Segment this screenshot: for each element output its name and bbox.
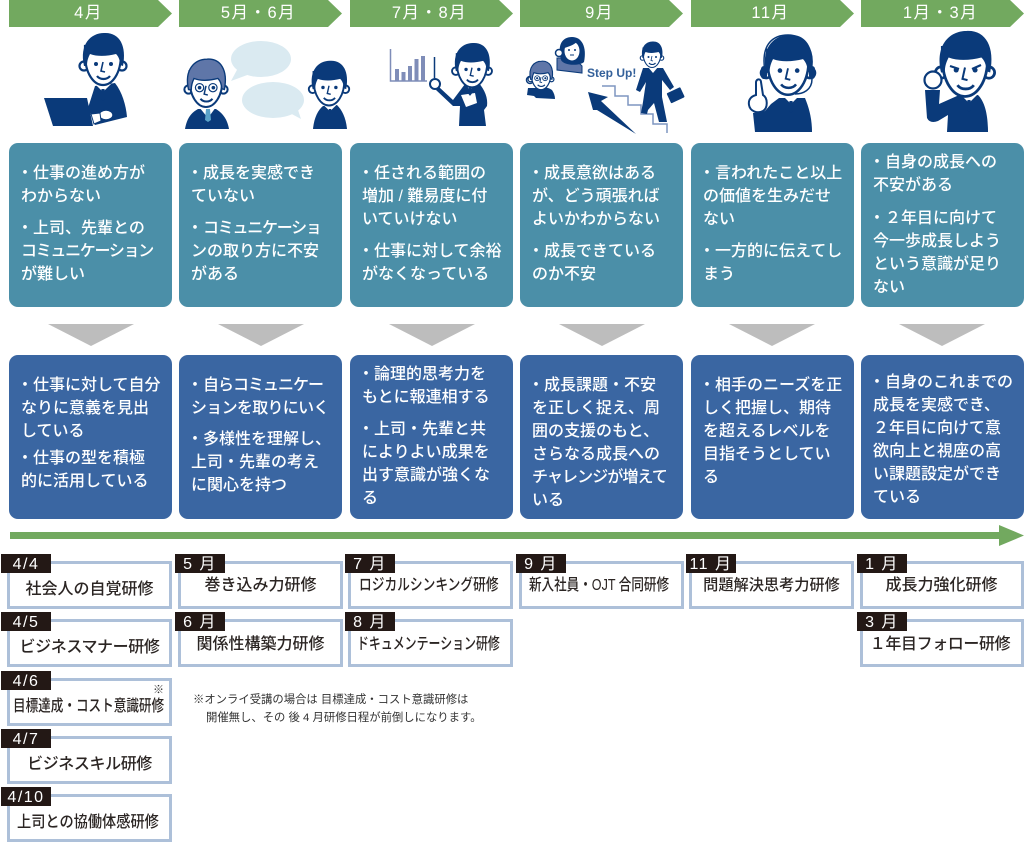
issues text	[699, 164, 842, 283]
icon: man presenting a bar chart	[390, 43, 492, 126]
header arrow: 9月: 9月	[585, 4, 614, 22]
date label: 4/5	[1, 612, 51, 631]
outcomes text: に関心を持つ	[191, 477, 287, 494]
outcomes text: ている	[873, 489, 921, 506]
panel: 7月・8月 issues	[350, 143, 513, 307]
date label: 7月: 7 月	[353, 556, 387, 573]
header arrow: 1月・3月	[861, 0, 1024, 27]
training box: 成長力強化研修: 成長力強化研修	[885, 577, 998, 594]
issues text	[528, 164, 660, 283]
training box: ビジネスマナー研修: ビジネスマナー研修	[20, 639, 159, 656]
training box: ビジネスマナー研修	[7, 619, 172, 667]
panel: 11月 issues	[691, 143, 854, 307]
speech bubbles	[231, 41, 304, 119]
issues text: 不安がある	[873, 177, 953, 194]
outcomes text	[869, 373, 1013, 506]
issues text: 上司、先輩との	[33, 220, 145, 237]
issues text: コミュニケーション	[21, 243, 153, 260]
training box: 目標達成・コスト意識研修: ※	[153, 684, 164, 696]
outcomes text: 欲向上と視座の高	[873, 443, 1001, 460]
outcomes text: 成長を実感でき、	[873, 397, 1000, 414]
issues text: ない	[703, 211, 735, 228]
date label: 1月	[857, 554, 907, 573]
icon: man with headset raising finger	[749, 35, 815, 132]
outcomes text: ・	[699, 377, 715, 394]
date label: 4/7	[1, 729, 51, 748]
outcomes text: 目指そうとしてい	[703, 446, 831, 463]
panel: 1月・3月 issues	[861, 143, 1024, 307]
training box: ロジカルシンキング研修: ロジカルシンキング研修	[359, 577, 499, 594]
panel: 9月 issues	[520, 143, 683, 307]
outcomes text: 自らコミュニケー	[203, 377, 323, 394]
training box: 関係性構築力研修	[178, 619, 343, 667]
issues text: の価値を生みだせ	[703, 188, 831, 205]
header arrow: 9月	[520, 0, 683, 27]
issues text: ２年目に向けて	[885, 210, 997, 227]
outcomes text	[358, 365, 490, 507]
issues text: ・	[699, 165, 715, 182]
date label: 8月	[345, 612, 395, 631]
outcomes text: 多様性を理解し、	[203, 431, 331, 448]
issues text: が、どう頑張れば	[532, 188, 660, 205]
header arrow: 7月・8月: 7月・8月	[392, 4, 467, 22]
panel: 7月・8月 outcomes	[350, 355, 513, 519]
outcomes text: ・	[187, 431, 203, 448]
training box: 1年目フォロー研修: １年目フォロー研修	[870, 636, 1010, 653]
training box: 問題解決思考力研修: 問題解決思考力研修	[703, 577, 840, 594]
outcomes text: 上司・先輩の考え	[191, 454, 319, 471]
header arrow: 1月・3月: 1月・3月	[903, 4, 978, 22]
issues text: ・	[17, 220, 33, 237]
issues text: 増加 / 難易度に付	[362, 188, 487, 205]
outcomes text: している	[21, 423, 85, 440]
issues text: が難しい	[21, 266, 85, 283]
outcomes text: る	[703, 469, 719, 486]
date label: 4/6: 4/6	[13, 673, 39, 690]
issues text: がなくなっている	[362, 266, 489, 283]
outcomes text: 成長課題・不安	[544, 377, 656, 394]
arrow: down 2	[218, 324, 304, 346]
issues text	[358, 164, 502, 283]
arrow: down 5	[729, 324, 815, 346]
outcomes text: 囲の支援のもと、	[532, 423, 659, 440]
outcomes text: ・	[358, 366, 374, 383]
training box: 成長力強化研修	[860, 561, 1024, 609]
header arrow: 11月: 11月	[751, 4, 790, 22]
icon: manager and employee talking	[184, 41, 349, 129]
date label: 7月	[345, 554, 395, 573]
outcomes text: によりよい成果を	[362, 444, 490, 461]
arrow: down 4	[559, 324, 645, 346]
training box: 新入社員・OJT 合同研修	[519, 561, 684, 609]
issues text: のか不安	[532, 266, 596, 283]
arrow: timeline	[10, 525, 1024, 546]
date label: 11月: 11 月	[689, 556, 733, 573]
outcomes text: を超えるレベルを	[703, 423, 831, 440]
date label: 4/10	[1, 787, 51, 806]
issues text: ・	[869, 210, 885, 227]
training box: ビジネスキル研修	[7, 736, 172, 784]
issues text	[869, 153, 1001, 296]
issues text: ・	[187, 165, 203, 182]
outcomes text: ・	[358, 421, 374, 438]
training box: 関係性構築力研修: 関係性構築力研修	[196, 636, 324, 653]
issues text: という意識が足り	[873, 256, 1001, 273]
issues text: 成長意欲はある	[544, 165, 656, 182]
panel: 9月 outcomes	[520, 355, 683, 519]
date label: 6月	[175, 612, 225, 631]
illustrations layer	[44, 30, 996, 134]
issues text: ・	[528, 243, 544, 260]
training box: ビジネスキル研修: ビジネスキル研修	[27, 756, 152, 773]
issues text: 今一歩成長しよう	[873, 233, 1001, 250]
date label: 4/6	[1, 671, 51, 690]
issues text: まう	[703, 266, 735, 283]
issues text	[17, 164, 154, 283]
issues text: わからない	[21, 188, 101, 205]
training box: 巻き込み力研修	[178, 561, 343, 609]
issues text: ンの取り方に不安	[191, 243, 319, 260]
Step Up label: Step Up!	[587, 66, 636, 80]
outcomes text: 仕事に対して自分	[33, 377, 161, 394]
date label: 5月	[175, 554, 225, 573]
header arrow: 4月	[9, 0, 172, 27]
panel: 5月・6月 issues	[179, 143, 342, 307]
date label: 3月: 3 月	[865, 614, 899, 631]
issues text: コミュニケーショ	[203, 220, 321, 237]
date label: 5月: 5 月	[183, 556, 217, 573]
issues text: ・	[17, 165, 33, 182]
outcomes text: 上司・先輩と共	[374, 421, 486, 438]
issues text: 任される範囲の	[374, 165, 486, 182]
training box: ロジカルシンキング研修	[348, 561, 513, 609]
issues text: がある	[191, 266, 239, 283]
outcomes text: ・	[528, 377, 544, 394]
date label: 4/4: 4/4	[13, 556, 39, 573]
outcomes text: 相手のニーズを正	[715, 377, 842, 394]
header arrow: 11月	[691, 0, 854, 27]
issues text: ・	[187, 220, 203, 237]
issues text: 成長を実感でき	[203, 165, 315, 182]
outcomes text: チャレンジが増えて	[532, 469, 667, 486]
issues text: よいかわからない	[532, 211, 660, 228]
outcomes text: しく把握し、期待	[703, 400, 831, 417]
outcomes text	[17, 376, 161, 490]
issues text: ていない	[191, 188, 255, 205]
outcomes text: 仕事の型を積極	[33, 450, 145, 467]
training box: 社会人の自覚研修: 社会人の自覚研修	[25, 581, 154, 598]
issues text: 言われたこと以上	[715, 165, 842, 182]
outcomes text: なりに意義を見出	[21, 400, 149, 417]
header arrow: 7月・8月	[350, 0, 513, 27]
footnote: 開催無し、その 後 4 月研修日程が前倒しになります。	[206, 712, 482, 724]
panel: 4月 issues	[9, 143, 172, 307]
outcomes text: 論理的思考力を	[374, 366, 486, 383]
outcomes text: ２年目に向けて意	[873, 420, 1001, 437]
panel: 5月・6月 outcomes	[179, 355, 342, 519]
date label: 9月: 9 月	[524, 556, 558, 573]
issues text: ・	[699, 243, 715, 260]
issues text: 仕事の進め方が	[33, 165, 145, 182]
issues text: 成長できている	[544, 243, 656, 260]
outcomes text: 出す意識が強くな	[362, 467, 490, 484]
arrow: down 6	[899, 324, 985, 346]
date label: 4/10: 4/10	[7, 789, 45, 806]
outcomes text: ・	[17, 377, 33, 394]
outcomes text: さらなる成長への	[532, 446, 660, 463]
outcomes text	[528, 376, 667, 509]
issues text: ・	[869, 154, 885, 171]
training box: 新入社員・OJT 合同研修: 新入社員・OJT 合同研修	[529, 577, 669, 594]
icon: step up staircase with colleagues	[526, 37, 685, 134]
panel: 11月 outcomes	[691, 355, 854, 519]
header arrow: 5月・6月	[179, 0, 342, 27]
outcomes text: ・	[869, 374, 885, 391]
training box: 1年目フォロー研修	[860, 619, 1024, 667]
outcomes text: ・	[187, 377, 203, 394]
date label: 1月: 1 月	[865, 556, 899, 573]
icon: man at laptop	[44, 33, 127, 126]
date label: 4/7: 4/7	[13, 731, 39, 748]
issues text: ない	[873, 279, 905, 296]
training box: 巻き込み力研修: 巻き込み力研修	[204, 577, 316, 594]
outcomes text: を正しく捉え、周	[532, 400, 660, 417]
training box: 目標達成・コスト意識研修	[7, 678, 172, 726]
outcomes text	[187, 376, 331, 494]
issues text: 一方的に伝えてし	[715, 243, 842, 260]
date label: 8月: 8 月	[353, 614, 387, 631]
panel: 1月・3月 outcomes	[861, 355, 1024, 519]
panel: 4月 outcomes	[9, 355, 172, 519]
training box: 上司との協働体感研修: 上司との協働体感研修	[17, 814, 159, 831]
date label: 4/5: 4/5	[13, 614, 39, 631]
date label: 3月	[857, 612, 907, 631]
issues text: いていけない	[362, 211, 458, 228]
training box: ドキュメンテーション研修: ドキュメンテーション研修	[357, 636, 500, 653]
training box: 問題解決思考力研修	[689, 561, 854, 609]
issues text: ・	[358, 243, 374, 260]
outcomes text: 的に活用している	[21, 473, 149, 490]
footnote: ※オンライ受講の場合は 目標達成・コスト意識研修は	[193, 694, 468, 706]
issues text: ・	[358, 165, 374, 182]
outcomes text: いる	[532, 492, 564, 509]
training box: ドキュメンテーション研修	[348, 619, 513, 667]
date label: 9月	[516, 554, 566, 573]
issues text: 仕事に対して余裕	[374, 243, 502, 260]
date label: 6月: 6 月	[183, 614, 217, 631]
icon: determined man with raised fist	[924, 31, 995, 132]
issues text: 自身の成長への	[885, 154, 997, 171]
training box: 社会人の自覚研修	[7, 561, 172, 609]
date label: 4/4	[1, 554, 51, 573]
outcomes text: もとに報連相する	[362, 389, 490, 406]
outcomes text: る	[362, 490, 378, 507]
outcomes text: ・	[17, 450, 33, 467]
arrow: down 3	[389, 324, 475, 346]
header arrow: 4月: 4月	[74, 4, 103, 22]
footnote	[193, 693, 482, 724]
outcomes text: ションを取りにいく	[191, 400, 329, 417]
issues text: ・	[528, 165, 544, 182]
arrow: down 1	[48, 324, 134, 346]
training box: 上司との協働体感研修	[7, 794, 172, 842]
outcomes text: 自身のこれまでの	[885, 374, 1013, 391]
training box: 目標達成・コスト意識研修: 目標達成・コスト意識研修	[13, 698, 164, 715]
outcomes text: い課題設定ができ	[873, 466, 1001, 483]
issues text	[187, 164, 321, 283]
header arrow: 5月・6月: 5月・6月	[221, 4, 296, 22]
outcomes text	[699, 376, 842, 486]
